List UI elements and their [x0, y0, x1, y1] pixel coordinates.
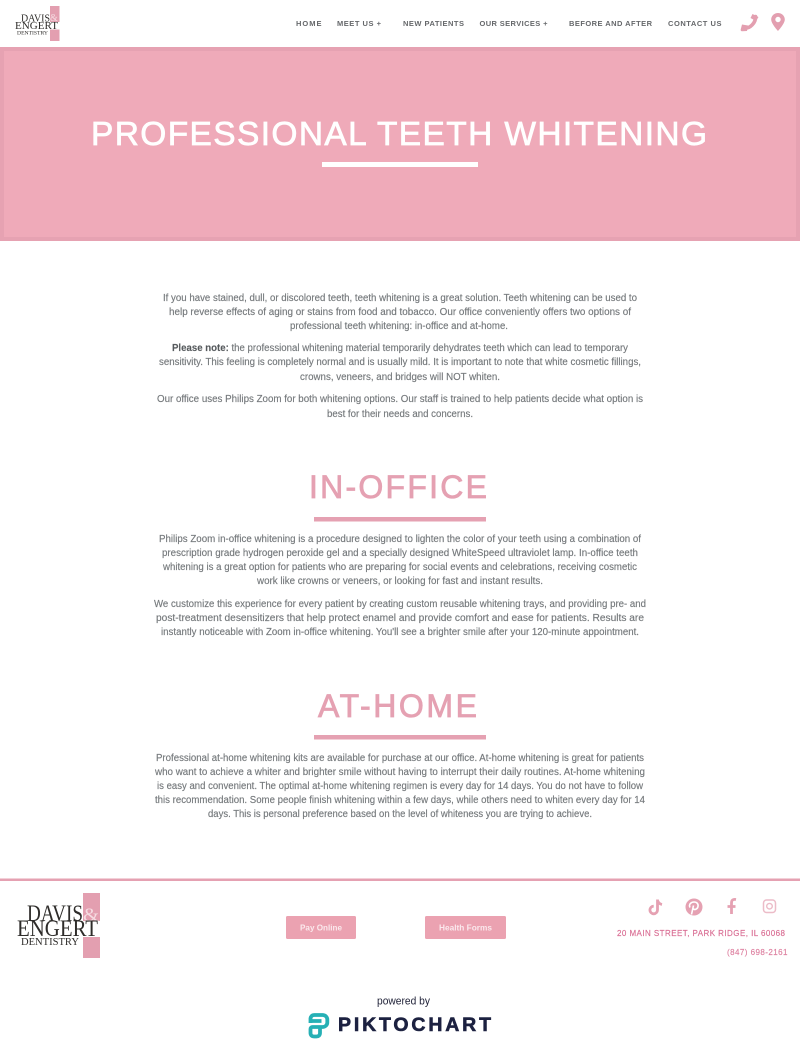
at-home text block: who want to achieve a whiter and brighter smile without having to interrupt their daily routines. At-home whitening — [154, 767, 645, 778]
in-office text block: whitening is a great option for patients who are preparing for social events and celebrations, receiving cosmetic — [162, 562, 637, 573]
icon: phone — [741, 14, 758, 31]
icon: facebook — [728, 899, 736, 914]
in-office text block: Philips Zoom in-office whitening is a procedure designed to lighten the color of your teeth using a combination of — [159, 534, 641, 545]
header logo: DENTISTRY — [17, 30, 48, 36]
heading: at-home: AT-HOME — [318, 688, 477, 724]
in-office text block: post-treatment desensitizers that help protect enamel and provide comfort and ease for patients. Results are — [156, 613, 644, 624]
navigation menu: NEW PATIENTS — [403, 19, 464, 28]
footer logo: DAVIS — [27, 901, 83, 926]
at-home text block: days. This is personal preference based on the level of whiteness you are trying to achieve. — [208, 809, 592, 820]
intro text block: sensitivity. This feeling is completely normal and is usually mild. It is important to note that white cosmetic fillings, — [159, 357, 641, 368]
hero banner — [0, 47, 800, 241]
title: PROFESSIONAL TEETH WHITENING — [91, 116, 707, 153]
icon: instagram — [764, 900, 776, 912]
icon: pinterest — [686, 898, 702, 916]
header logo: ENGERT — [15, 20, 58, 32]
icon: piktochart mark — [310, 1015, 327, 1036]
intro text block: professional teeth whitening: in-office and at-home. — [290, 321, 508, 332]
navigation menu: HOME — [296, 19, 322, 28]
phone number: (847) 698-2161 — [727, 948, 788, 957]
intro text block — [157, 293, 643, 420]
intro text block: help reverse effects of aging or stains from food and tobacco. Our office conveniently offers two options of — [169, 307, 631, 318]
wordmark: PIKTOCHART — [338, 1014, 491, 1036]
at-home text block: is easy and convenient. The optimal at-home whitening regimen is every day for 14 days. You do not have to follow — [157, 781, 644, 792]
footer logo: DENTISTRY — [21, 936, 79, 948]
header logo: DAVIS — [21, 12, 50, 24]
button: health forms — [425, 916, 506, 939]
intro text block: Please note: the professional whitening material temporarily dehydrates teeth which can lead to temporary — [172, 343, 628, 354]
button: health forms: Health Forms — [439, 922, 492, 932]
header logo: & — [50, 13, 58, 24]
in-office underline — [314, 517, 486, 522]
at-home text block: Professional at-home whitening kits are available for purchase at our office. At-home whitening is great for patients — [156, 753, 644, 764]
navigation menu: CONTACT US — [668, 19, 722, 28]
navigation menu — [296, 19, 722, 28]
footer logo: ENGERT — [17, 916, 98, 941]
footer logo — [17, 893, 100, 958]
in-office text block: work like crowns or veneers, or looking for fast and instant results. — [256, 576, 543, 587]
heading: in-office: IN-OFFICE — [309, 469, 487, 505]
piktochart logo — [310, 1014, 491, 1036]
footer logo: & — [83, 905, 99, 926]
footer divider — [0, 878, 800, 881]
in-office text block: We customize this experience for every patient by creating custom reusable whitening trays, and providing pre- and — [154, 599, 646, 610]
in-office text block — [154, 534, 646, 638]
address: 20 MAIN STREET, PARK RIDGE, IL 60068 — [617, 929, 786, 938]
navigation menu: BEFORE AND AFTER — [569, 19, 653, 28]
title underline — [322, 162, 478, 167]
intro text block: If you have stained, dull, or discolored teeth, teeth whitening is a great solution. Teeth whitening can be used to — [163, 293, 637, 304]
at-home text block: this recommendation. Some people finish whitening within a few days, while others need to whiten every day for 14 — [155, 795, 645, 806]
intro text block: best for their needs and concerns. — [327, 409, 473, 420]
powered by label: powered by — [377, 996, 430, 1008]
icon: tiktok — [650, 900, 662, 914]
navigation menu: OUR SERVICES + — [480, 19, 548, 28]
button: pay online — [286, 916, 356, 939]
at-home underline — [314, 735, 486, 740]
icon: location pin — [771, 13, 785, 31]
in-office text block: prescription grade hydrogen peroxide gel and a specially designed WhiteSpeed ultraviolet lamp. In-office teeth — [162, 548, 638, 559]
button: pay online: Pay Online — [300, 922, 342, 932]
navigation menu: MEET US + — [337, 19, 382, 28]
header logo — [15, 6, 60, 41]
intro text block: Our office uses Philips Zoom for both whitening options. Our staff is trained to help patients decide what option is — [157, 394, 643, 405]
in-office text block: instantly noticeable with Zoom in-office whitening. You'll see a brighter smile after your 120-minute appointment. — [161, 627, 639, 638]
at-home text block — [154, 753, 645, 820]
intro text block: crowns, veneers, and bridges will NOT whiten. — [300, 372, 500, 383]
